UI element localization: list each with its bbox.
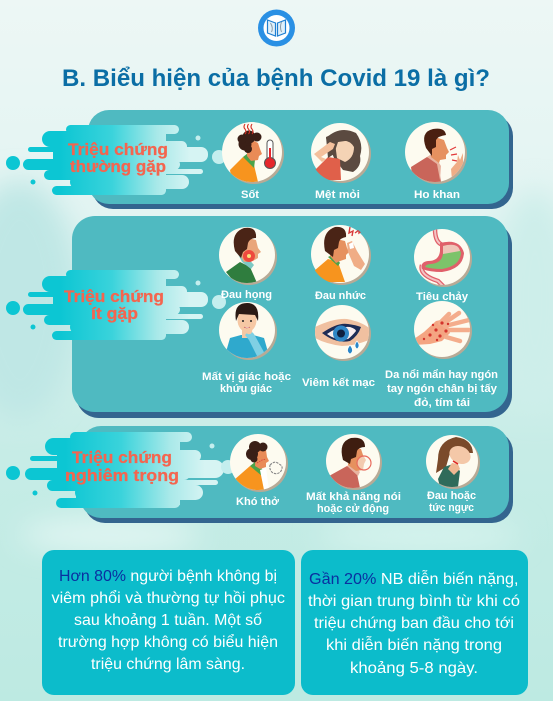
callout: nearly 20%: Gần 20% NB diễn biến nặng, (309, 569, 518, 588)
icon: loss of taste or smell (219, 302, 277, 360)
label: chest pain: Đau hoặc (427, 490, 476, 502)
icon: dry cough (405, 122, 467, 184)
label: loss of speech or movement (306, 491, 401, 515)
callout: over 80%: Hơn 80% người bệnh không bị (59, 568, 277, 585)
label: skin rash: Da nổi mẩn hay ngón (385, 369, 498, 381)
label: chest pain: tức ngực (429, 502, 474, 514)
label: dry cough: Ho khan (414, 189, 460, 201)
icon: fatigue (311, 123, 371, 183)
label: shortness of breath: Khó thở (236, 496, 279, 508)
callout: nearly 20%: khoảng 5-8 ngày. (350, 660, 478, 677)
heading: common symptoms (68, 141, 168, 176)
label: loss of taste or smell: Mất vị giác hoặc (202, 371, 291, 383)
label: skin rash (385, 369, 498, 409)
heading: uncommon symptoms: Triệu chứng (64, 288, 164, 306)
banner: severe symptoms (6, 432, 235, 508)
icon: loss of speech or movement (326, 434, 382, 490)
label: conjunctivitis: Viêm kết mạc (302, 377, 375, 389)
heading: severe symptoms: nghiêm trọng (65, 467, 179, 485)
icon: shortness of breath (230, 434, 288, 492)
callout: nearly 20%: thời gian trung bình từ khi có (308, 593, 520, 610)
label: body aches: Đau nhức (315, 290, 366, 302)
callout: nearly 20%: triệu chứng ban đầu cho tới (314, 615, 514, 632)
callout: over 80% (42, 550, 295, 695)
label: fatigue: Mệt mỏi (315, 189, 360, 201)
heading: severe symptoms: Triệu chứng (72, 449, 172, 467)
icon: diarrhea (414, 229, 472, 287)
label: loss of taste or smell: khứu giác (220, 383, 272, 395)
heading: uncommon symptoms: ít gặp (91, 305, 138, 323)
heading: uncommon symptoms (64, 288, 164, 323)
label: skin rash: tay ngón chân bị tấy (387, 383, 498, 395)
icon: fever (222, 122, 284, 184)
icon: sore throat (219, 227, 277, 285)
callout: over 80%: triệu chứng lâm sàng. (91, 656, 245, 673)
icon: body aches (311, 225, 371, 285)
label: chest pain (427, 490, 476, 514)
heading: severe symptoms (65, 449, 179, 485)
callout: over 80%: viêm phổi và thường tự hồi phục (52, 589, 285, 607)
callout: over 80%: sau khoảng 1 tuần. Một số (74, 612, 262, 629)
callout: nearly 20% (301, 550, 528, 695)
panel: severe symptoms (6, 426, 513, 523)
icon: skin rash (414, 301, 472, 359)
icon: chest pain (426, 435, 480, 489)
title: B. Biểu hiện của bệnh Covid 19 là gì? (62, 65, 490, 92)
label: loss of taste or smell (202, 371, 291, 395)
heading: common symptoms: Triệu chứng (68, 141, 168, 159)
icon: conjunctivitis (315, 305, 371, 361)
logo (258, 10, 295, 46)
label: loss of speech or movement: Mất khả năng nói (306, 491, 401, 503)
label: skin rash: đỏ, tím tái (414, 397, 470, 409)
heading: common symptoms: thường gặp (70, 158, 166, 176)
banner: uncommon symptoms (6, 270, 226, 340)
label: loss of speech or movement: hoặc cử động (317, 503, 389, 515)
label: fever: Sốt (241, 189, 259, 201)
callout: over 80%: trường hợp không có biểu hiện (58, 633, 278, 651)
banner: common symptoms (6, 125, 226, 195)
label: diarrhea: Tiêu chảy (416, 291, 469, 303)
panel: uncommon symptoms (6, 216, 512, 418)
callout: nearly 20%: khi diễn biến nặng trong (326, 635, 502, 654)
label: sore throat: Đau họng (221, 289, 272, 301)
panel: common symptoms (6, 110, 513, 209)
